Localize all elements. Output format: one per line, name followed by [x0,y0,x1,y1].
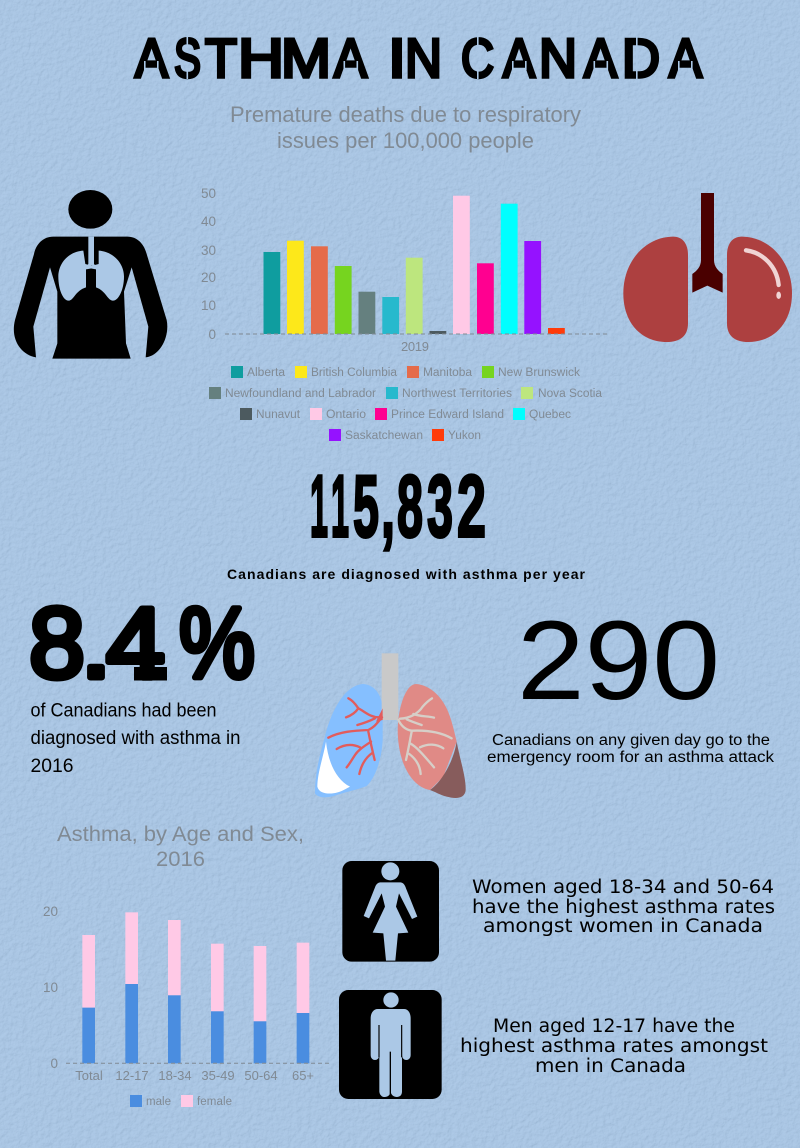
legend: Nunavut [256,409,301,421]
title: A [135,27,168,89]
x axis labels: 50-64 [244,1068,278,1083]
legend: Saskatchewan [345,430,423,442]
bars [82,912,309,1063]
y axis labels: 40 [201,214,216,229]
bars [264,196,565,334]
title: N [539,27,577,89]
x axis labels: 65+ [292,1068,314,1083]
legend: male [146,1096,171,1108]
title: M [281,27,331,89]
heading: asthma by age and sex: 2016 [156,848,205,871]
x axis labels: 12-17 [115,1068,149,1083]
icon: woman [342,861,439,962]
heading: asthma by age and sex: Asthma, by Age and Sex, [57,823,304,846]
legend: Nova Scotia [538,388,603,400]
legend [130,1095,232,1108]
icon: anatomical lungs [315,653,466,798]
icon: human torso with lungs [14,190,167,359]
big number: 115,832: 1 [331,456,349,556]
y axis labels: 10 [201,298,216,313]
title: A [503,27,535,89]
y axis labels [201,186,216,342]
caption: diagnosed per year: Canadians are diagnosed with asthma per year [227,566,586,582]
x axis labels: 35-49 [201,1068,235,1083]
text: women: have the highest asthma rates [472,897,775,918]
big number: 115,832: 5 [353,456,379,556]
text: 8.4% description [30,700,240,777]
title: A [584,27,617,89]
y axis labels: 30 [201,243,216,258]
title [135,27,702,89]
title: C [461,27,494,89]
text: 290 description: emergency room for an asthma attack [487,749,774,766]
x axis labels: Total [75,1068,103,1083]
stat: 8.4% [29,588,255,700]
text: men: Men aged 12-17 have the [493,1016,735,1037]
y axis labels: 20 [43,904,58,919]
stat: 8.4%: 4 [106,588,165,700]
x axis label: 2019 [401,339,429,354]
icon: man [339,990,442,1099]
y axis labels: 50 [201,186,216,201]
legend: Newfoundland and Labrador [225,388,376,400]
legend: British Columbia [311,367,398,379]
text: men [460,1016,768,1077]
title: D [622,27,660,89]
legend: Northwest Territories [402,388,512,400]
title: A [669,27,702,89]
icon: red lungs [623,193,792,342]
bar chart: premature deaths by province [201,186,608,442]
text: women [472,877,775,937]
legend: Quebec [529,409,571,421]
title: N [405,27,442,89]
heading: premature deaths: issues per 100,000 people [277,128,534,153]
big number: 115,832: 2 [457,456,486,556]
title: A [334,27,367,89]
text: 290 description: Canadians on any given day go to the [492,732,770,749]
heading: asthma by age and sex [57,823,304,871]
stat: 8.4%: % [179,588,255,700]
legend: Ontario [326,409,366,421]
text: 290 description [487,732,774,766]
big number: 115,832: 3 [427,456,453,556]
text: 8.4% description: 2016 [30,756,74,777]
y axis labels: 10 [43,980,58,995]
text: women: amongst women in Canada [483,916,763,937]
stat: 8.4%: . [80,588,112,700]
legend [209,366,603,442]
title: I [388,27,406,89]
text: 8.4% description: diagnosed with asthma in [30,728,240,749]
legend: Manitoba [423,367,473,379]
legend: Prince Edward Island [391,409,504,421]
text: 8.4% description: of Canadians had been [30,700,216,722]
big number: 115,832: , [381,456,395,556]
stacked bar chart: asthma by age and sex [43,904,330,1108]
heading: premature deaths: Premature deaths due to respiratory [230,102,581,127]
x axis labels [75,1068,314,1083]
y axis labels: 0 [50,1056,58,1071]
big number: 115,832: 1 [310,456,328,556]
title: T [205,27,237,89]
title: H [238,27,284,89]
heading: premature deaths [230,102,581,153]
y axis labels: 0 [208,327,216,342]
text: women: Women aged 18-34 and 50-64 [472,877,774,898]
text: men: men in Canada [535,1056,686,1077]
x axis labels: 18-34 [158,1068,192,1083]
title: S [174,27,201,89]
y axis labels: 20 [201,270,216,285]
legend: female [197,1096,232,1108]
legend: Alberta [247,367,286,379]
legend: New Brunswick [498,367,580,379]
text: men: highest asthma rates amongst [460,1036,768,1057]
y axis labels [43,904,58,1071]
stat: 8.4%: 8 [29,588,85,700]
legend: Yukon [448,430,481,442]
big number: 115,832: 8 [397,456,423,556]
stat: 290: 290 [517,598,720,723]
